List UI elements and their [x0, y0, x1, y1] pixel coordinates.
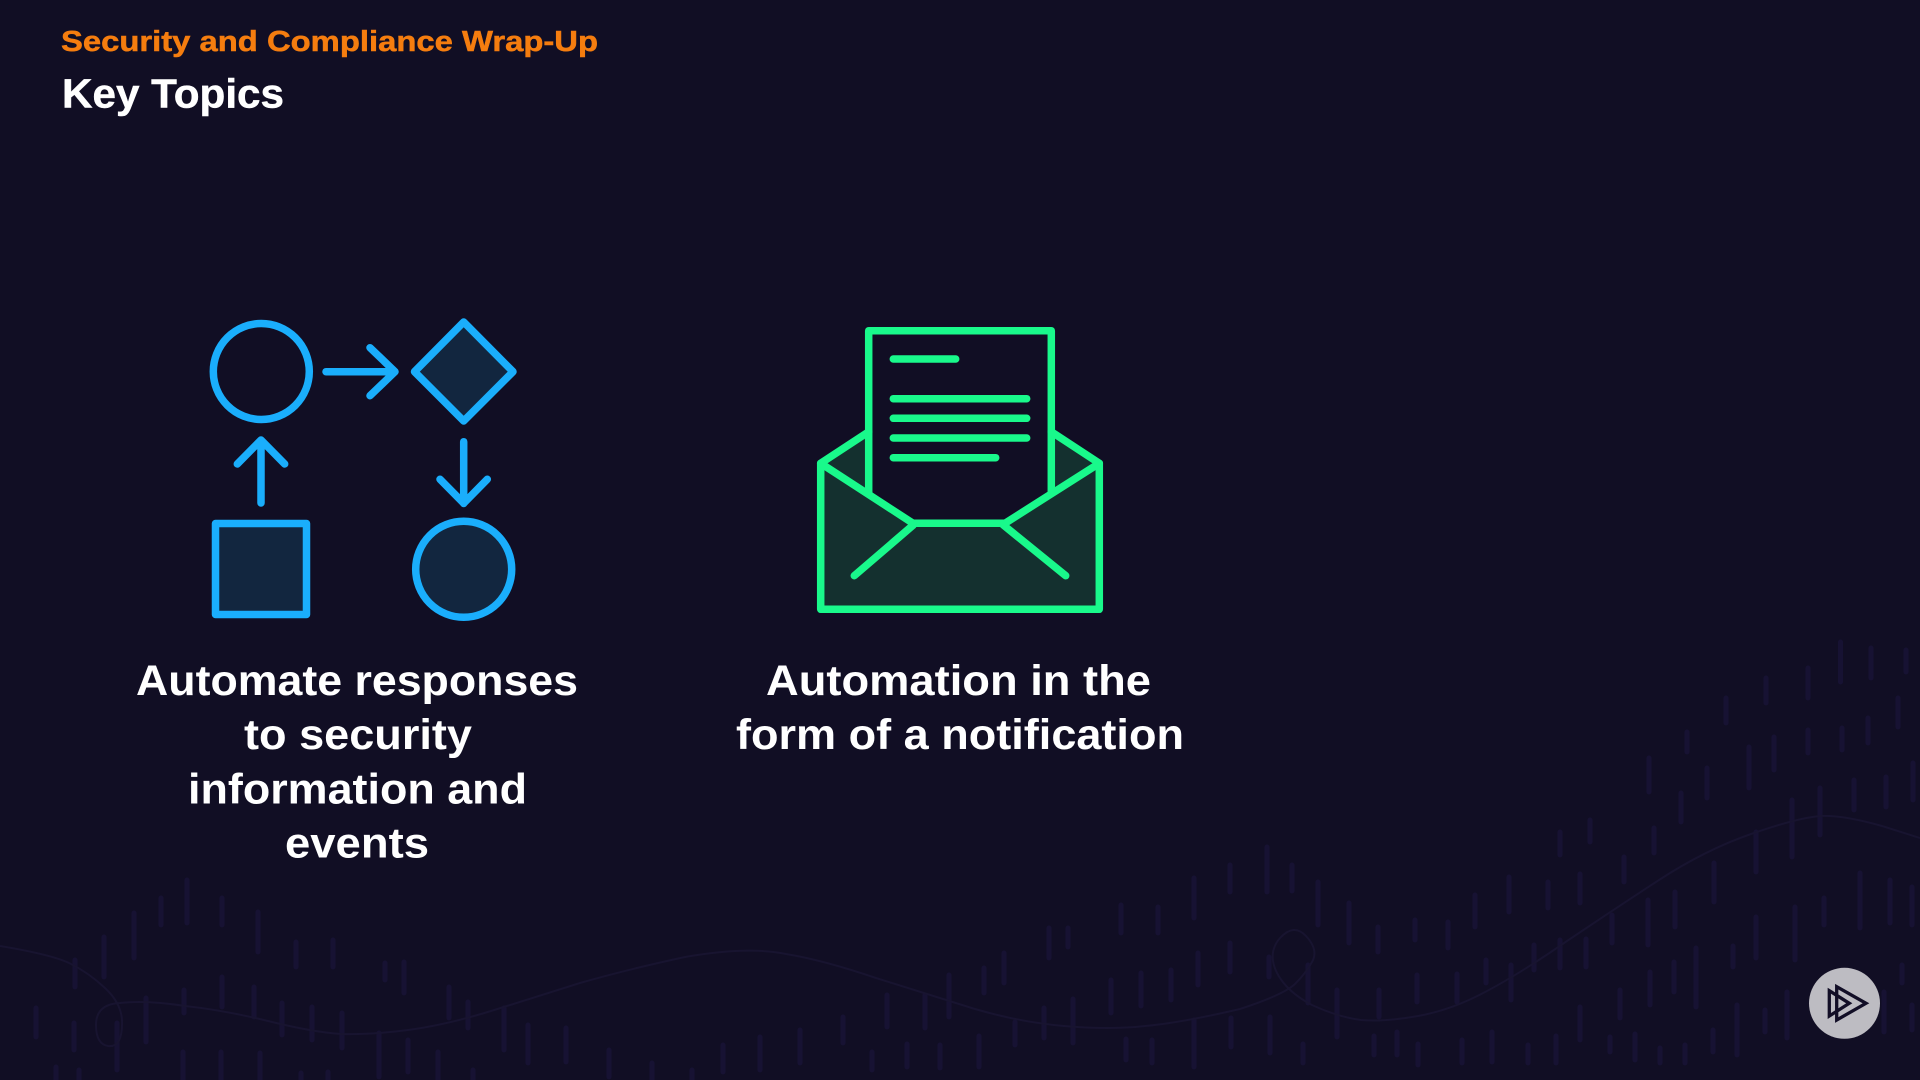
section label: Security and Compliance Wrap-Up	[61, 26, 598, 58]
label: automation notification: form of a notification	[736, 711, 1184, 759]
background decoration: faint dashes and curve	[0, 642, 1920, 1080]
label: automate responses: information and	[188, 766, 527, 814]
label: automate responses: to security	[244, 711, 472, 759]
label: automate responses	[136, 657, 578, 868]
icon: process flow	[213, 322, 513, 617]
title: Key Topics	[62, 70, 284, 116]
label: automate responses: events	[285, 820, 429, 868]
label: automation notification: Automation in the	[766, 657, 1151, 705]
label: automate responses: Automate responses	[136, 657, 578, 705]
label: automation notification	[736, 657, 1184, 759]
icon: play logo badge	[1809, 968, 1880, 1039]
icon: open envelope with letter	[821, 331, 1099, 609]
